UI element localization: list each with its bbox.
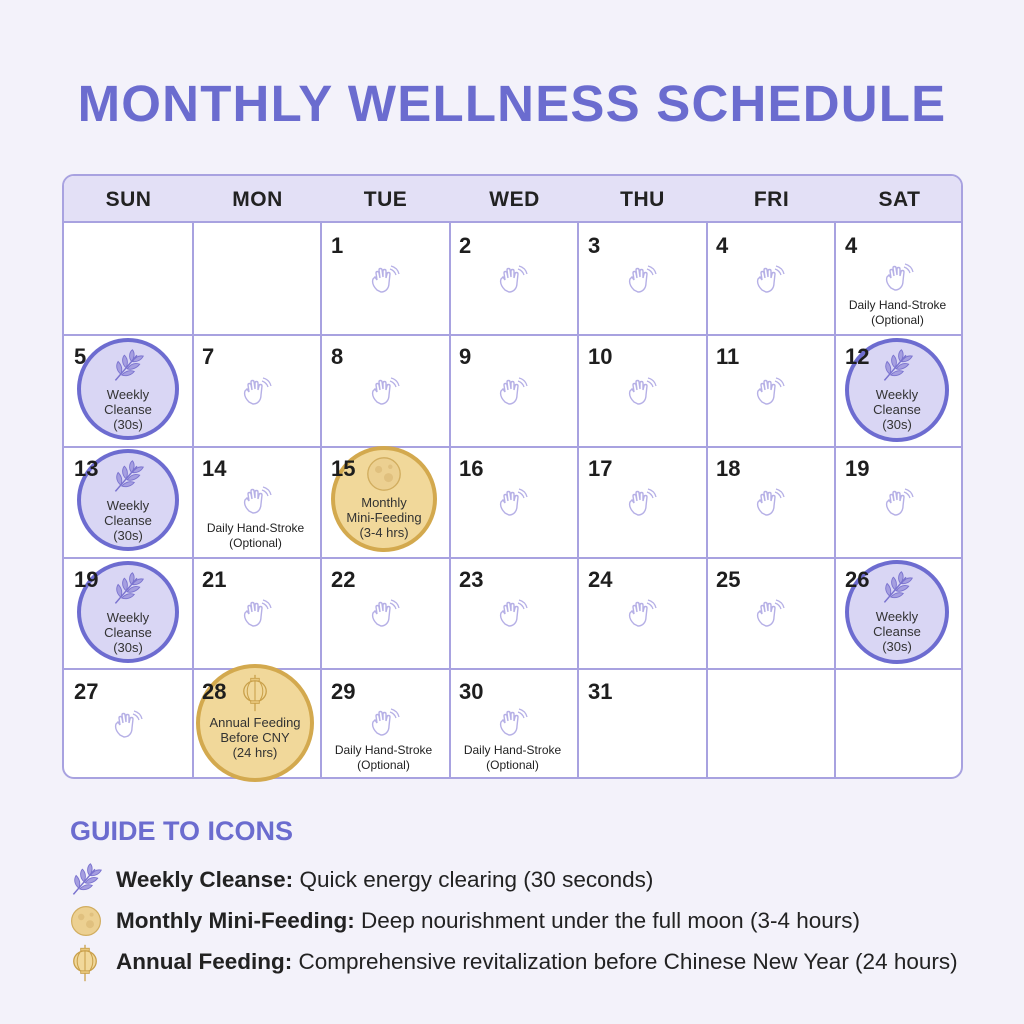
cells layer: 8	[331, 344, 343, 369]
cells layer: 24	[588, 567, 612, 592]
cells layer: 19	[845, 456, 869, 481]
text: (30s)	[113, 528, 143, 543]
gold: monthly mini-feeding	[331, 446, 437, 552]
row 1: 1	[331, 233, 343, 258]
guide heading: GUIDE TO ICONS	[70, 816, 293, 846]
text: Weekly	[107, 610, 149, 625]
cells layer: 30	[459, 679, 483, 704]
cells layer: (Optional)	[871, 313, 924, 327]
header row: FRI	[754, 188, 789, 211]
row 3: 14	[202, 456, 226, 481]
cells layer: 10	[588, 344, 612, 369]
legend: Weekly Cleanse: Quick energy clearing (30 seconds)	[116, 867, 653, 892]
cells layer: 17	[588, 456, 612, 481]
cells layer: (Optional)	[229, 536, 282, 550]
gold: annual feeding	[196, 664, 314, 782]
cells layer: 31	[588, 679, 612, 704]
cells layer: 23	[459, 567, 483, 592]
text: (30s)	[882, 417, 912, 432]
row 5: 27	[74, 679, 98, 704]
text: Weekly	[876, 609, 918, 624]
cells layer: Daily Hand-Stroke	[207, 521, 304, 535]
header row: SAT	[879, 188, 920, 211]
title: MONTHLY WELLNESS SCHEDULE	[78, 75, 946, 132]
numbers over circles	[74, 344, 869, 704]
text: Cleanse	[104, 513, 152, 528]
text: Weekly	[876, 387, 918, 402]
cells layer: Daily Hand-Stroke	[464, 743, 561, 757]
gold: monthly mini-feeding: (3-4 hrs)	[359, 525, 409, 540]
cells layer: (Optional)	[486, 758, 539, 772]
header row: MON	[232, 188, 283, 211]
cells layer: (Optional)	[357, 758, 410, 772]
text: Cleanse	[104, 625, 152, 640]
calendar grid	[62, 174, 963, 779]
text: 5	[74, 344, 86, 369]
text: (30s)	[882, 639, 912, 654]
cells layer: 22	[331, 567, 355, 592]
gold: annual feeding: Before CNY	[220, 730, 290, 745]
text: 12	[845, 344, 869, 369]
text: 13	[74, 456, 98, 481]
cells layer: 2	[459, 233, 471, 258]
text: 26	[845, 567, 869, 592]
cells layer: 9	[459, 344, 471, 369]
gold: monthly mini-feeding: Mini-Feeding	[346, 510, 422, 525]
gold: monthly mini-feeding: Monthly	[361, 495, 407, 510]
text: Cleanse	[873, 402, 921, 417]
header row: WED	[489, 188, 540, 211]
header row: TUE	[364, 188, 407, 211]
cells layer: 4	[716, 233, 728, 258]
text: (30s)	[113, 640, 143, 655]
text: 28	[202, 679, 226, 704]
text: 15	[331, 456, 355, 481]
cells layer: 4	[845, 233, 857, 258]
row 2: 7	[202, 344, 214, 369]
row 4: 21	[202, 567, 226, 592]
gold: annual feeding: Annual Feeding	[209, 715, 301, 730]
cells layer: 16	[459, 456, 483, 481]
cells layer: 29	[331, 679, 355, 704]
cells layer: 11	[716, 344, 739, 369]
text: Weekly	[107, 387, 149, 402]
text: Cleanse	[104, 402, 152, 417]
header row: THU	[620, 188, 665, 211]
legend: Monthly Mini-Feeding: Deep nourishment under the full moon (3-4 hours)	[116, 908, 860, 933]
text: (30s)	[113, 417, 143, 432]
text: 19	[74, 567, 98, 592]
header row: SUN	[106, 188, 151, 211]
cells layer: Daily Hand-Stroke	[335, 743, 432, 757]
cells layer: 3	[588, 233, 600, 258]
text: Weekly	[107, 498, 149, 513]
cells layer: 25	[716, 567, 740, 592]
cells layer: Daily Hand-Stroke	[849, 298, 946, 312]
legend: Annual Feeding: Comprehensive revitalization before Chinese New Year (24 hours)	[116, 949, 958, 974]
cells layer: 18	[716, 456, 740, 481]
weekly cleanse circles	[77, 338, 949, 664]
legend	[71, 863, 958, 982]
gold: annual feeding: (24 hrs)	[233, 745, 277, 760]
text: Cleanse	[873, 624, 921, 639]
header row	[64, 176, 965, 223]
